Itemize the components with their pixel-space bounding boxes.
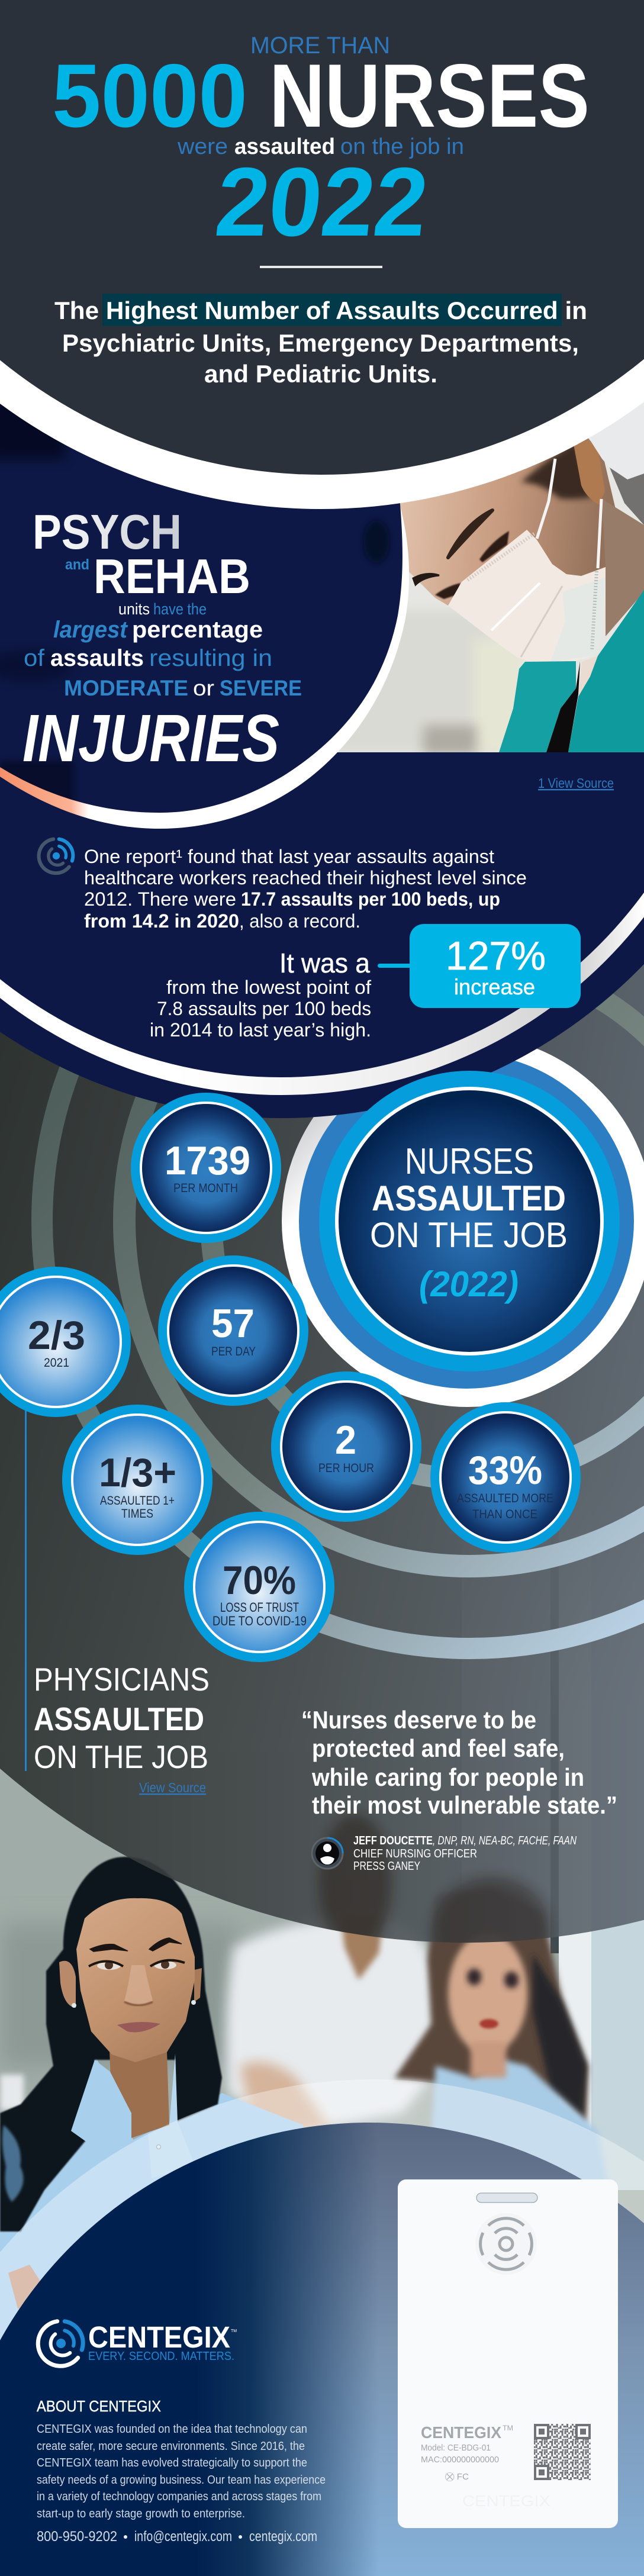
text block: psych and rehab injuries — [22, 504, 302, 775]
stat: 2 per hour — [271, 1371, 421, 1522]
stat: 1739 per month: PER MONTH — [173, 1181, 238, 1195]
text block: about centegix: safety needs of a growing business. Our team has experience — [37, 2474, 326, 2487]
logo: centegix — [38, 2320, 237, 2366]
dark photo shadows at left edge — [0, 397, 389, 811]
subtitle: highest number of assaults: and Pediatric Units. — [204, 360, 437, 388]
photo: hospital staff background — [0, 1310, 644, 2340]
badge label text: ⛒ FC — [445, 2472, 469, 2482]
source link 2: View Source — [139, 1780, 206, 1795]
text block: psych and rehab injuries: PSYCH — [33, 504, 182, 559]
contact details: 800-950-9202 — [37, 2529, 117, 2545]
heading: physicians assaulted on the job — [34, 1661, 210, 1775]
heading: physicians assaulted on the job: PHYSICIANS — [34, 1661, 210, 1698]
contact details: info@centegix.com — [134, 2529, 232, 2545]
circle: nurses assaulted on the job 2022 — [319, 1071, 620, 1371]
callout: 127 percent increase: increase — [454, 975, 535, 999]
divider line — [260, 266, 382, 268]
stat: 2/3 in 2021: 2021 — [44, 1356, 69, 1370]
title: more than 5000 nurses — [52, 33, 590, 257]
text block: psych and rehab injuries: percentage — [132, 617, 263, 643]
stat: 57 per day: 57 — [211, 1301, 255, 1346]
stat: 70 percent loss of trust — [184, 1512, 334, 1662]
heading: physicians assaulted on the job: ON THE JOB — [34, 1738, 208, 1775]
panel: navy section with report text — [0, 846, 644, 1118]
text block: it was a: It was a — [279, 948, 370, 978]
text block: about centegix: CENTEGIX team has evolved strategically to support the — [37, 2456, 307, 2469]
translucent arc — [0, 2079, 644, 2576]
text block: psych and rehab injuries: or — [193, 676, 214, 700]
navy band behind psych panel — [0, 391, 644, 846]
text block: psych and rehab injuries: and — [65, 556, 89, 573]
attribution — [353, 1834, 577, 1873]
icon: person avatar — [312, 1838, 343, 1869]
contact details: centegix.com — [249, 2529, 317, 2545]
stat: 2 per hour: PER HOUR — [318, 1461, 374, 1475]
attribution: CHIEF NURSING OFFICER — [353, 1847, 477, 1860]
text block: psych and rehab injuries: have the — [153, 600, 207, 618]
attribution: PRESS GANEY — [353, 1860, 420, 1873]
psych panel navy shape — [0, 391, 402, 813]
white arc under header — [0, 0, 644, 509]
title: more than 5000 nurses: were — [177, 134, 228, 159]
text block: about centegix: start-up to early stage growth to enterprise. — [37, 2507, 245, 2520]
text block: it was a: 7.8 assaults per 100 beds — [157, 998, 371, 1019]
stat: 57 per day: PER DAY — [211, 1345, 256, 1358]
text block: psych and rehab injuries: largest — [53, 617, 128, 643]
circle: nurses assaulted on the job 2022: ASSAULTED — [372, 1178, 566, 1218]
badge label text: TM — [503, 2424, 513, 2432]
stat: 33 percent assaulted more than once: THAN ONCE — [472, 1508, 537, 1521]
title: more than 5000 nurses: 5000 — [52, 46, 247, 146]
text block: psych and rehab injuries: REHAB — [94, 549, 250, 604]
stat: 57 per day — [158, 1255, 308, 1406]
text block: one report found: 2012. There were — [84, 888, 236, 910]
badge label text: Model: CE-BDG-01 — [421, 2443, 491, 2453]
stat: 2/3 in 2021: 2/3 — [28, 1313, 85, 1358]
title: more than 5000 nurses: assaulted — [234, 134, 335, 159]
text block: one report found: from 14.2 in 2020 — [84, 910, 239, 932]
badge label text: MAC:000000000000 — [421, 2455, 499, 2465]
text block: it was a — [150, 948, 371, 1041]
photo: nurse wearing surgical mask — [337, 402, 644, 752]
subtitle: highest number of assaults: The Highest Number of Assaults Occurred in — [54, 297, 587, 324]
quote: “Nurses deserve to be — [301, 1706, 536, 1734]
attribution: JEFF DOUCETTE — [353, 1834, 433, 1847]
connector line — [378, 964, 413, 968]
heading: physicians assaulted on the job: ASSAULTED — [34, 1701, 204, 1737]
icon: centegix signal small — [39, 839, 73, 873]
title: more than 5000 nurses: NURSES — [269, 46, 590, 146]
embossed badge wordmark: CENTEGIX — [462, 2492, 550, 2510]
text block: about centegix: in a variety of technology companies and across stages from — [37, 2490, 321, 2503]
subtitle: highest number of assaults — [54, 294, 587, 388]
stat: 1739 per month — [131, 1093, 281, 1243]
title: more than 5000 nurses: on the job in — [340, 134, 464, 159]
contact details — [37, 2529, 317, 2545]
logo: centegix: TM — [231, 2329, 237, 2333]
text block: it was a: from the lowest point of — [166, 977, 371, 998]
stat: 1/3+ assaulted 1+ times: 1/3+ — [99, 1450, 176, 1495]
text block: one report found: 17.7 assaults per 100 beds, up — [241, 888, 500, 910]
panel: header dark circle — [0, 0, 644, 475]
logo: centegix: EVERY. SECOND. MATTERS. — [88, 2350, 234, 2363]
quote: while caring for people in — [311, 1763, 584, 1791]
quote — [301, 1706, 617, 1819]
text block: about centegix — [37, 2397, 326, 2520]
psych panel ring — [0, 391, 409, 829]
text block: psych and rehab injuries: INJURIES — [22, 701, 279, 775]
text block: one report found — [84, 846, 527, 932]
badge label text — [421, 2423, 513, 2482]
big circle outer halos — [282, 1035, 644, 1407]
stat: 2/3 in 2021 — [0, 1267, 131, 1417]
stat: 70 percent loss of trust: DUE TO COVID-19 — [212, 1614, 307, 1628]
stat: 2 per hour: 2 — [335, 1418, 356, 1463]
source link 1: 1 View Source — [538, 775, 614, 791]
text block: about centegix: create safer, more secure environments. Since 2016, the — [37, 2440, 305, 2453]
text block: psych and rehab injuries: units — [118, 600, 150, 618]
stat: 1739 per month: 1739 — [165, 1138, 250, 1183]
text block: psych and rehab injuries: MODERATE — [64, 676, 188, 700]
text block: psych and rehab injuries: of — [24, 645, 45, 671]
text block: psych and rehab injuries: SEVERE — [220, 676, 302, 700]
attribution: , DNP, RN, NEA-BC, FACHE, FAAN — [433, 1834, 577, 1847]
text block: one report found: One report¹ found that last year assaults against — [84, 846, 494, 867]
quote: their most vulnerable state.” — [312, 1791, 617, 1819]
stat: 1/3+ assaulted 1+ times: TIMES — [121, 1507, 153, 1521]
callout: 127 percent increase: 127% — [446, 933, 546, 978]
stat: 1/3+ assaulted 1+ times: ASSAULTED 1+ — [100, 1494, 175, 1508]
text block: one report found: healthcare workers reached their highest level since — [84, 867, 527, 888]
text block: psych and rehab injuries: resulting in — [149, 645, 272, 671]
text block: it was a: in 2014 to last year’s high. — [150, 1019, 371, 1041]
logo: centegix: CENTEGIX — [88, 2320, 230, 2354]
subtitle: highest number of assaults: Psychiatric Units, Emergency Departments, — [62, 329, 579, 357]
callout: 127 percent increase — [410, 924, 581, 1008]
badge label text: CENTEGIX — [421, 2423, 501, 2442]
circle: nurses assaulted on the job 2022: ON THE JOB — [370, 1215, 568, 1255]
title: more than 5000 nurses: MORE THAN — [250, 33, 390, 59]
stat: 33 percent assaulted more than once: ASSAULTED MORE — [457, 1492, 553, 1505]
stat: 1/3+ assaulted 1+ times — [62, 1405, 212, 1555]
text block: psych and rehab injuries: assaults — [50, 645, 144, 671]
text block: about centegix: CENTEGIX was founded on the idea that technology can — [37, 2423, 307, 2436]
stat: 70 percent loss of trust: LOSS OF TRUST — [220, 1600, 299, 1615]
badge device — [398, 2179, 618, 2528]
stat: 33 percent assaulted more than once: 33% — [468, 1448, 542, 1493]
title: more than 5000 nurses: 2022 — [211, 147, 433, 257]
circle: nurses assaulted on the job 2022: (2022) — [419, 1264, 519, 1304]
quote: protected and feel safe, — [312, 1734, 565, 1762]
panel: about footer background — [0, 2119, 644, 2576]
stat: 33 percent assaulted more than once — [430, 1402, 581, 1553]
circle: nurses assaulted on the job 2022: NURSES — [405, 1141, 534, 1182]
vertical blue line — [25, 1411, 27, 1771]
text block: about centegix: ABOUT CENTEGIX — [37, 2397, 161, 2415]
stat: 70 percent loss of trust: 70% — [223, 1558, 296, 1603]
panel: gray overlay with concentric rings — [0, 964, 644, 1943]
QR code — [534, 2424, 591, 2480]
text block: one report found: , also a record. — [239, 910, 360, 932]
